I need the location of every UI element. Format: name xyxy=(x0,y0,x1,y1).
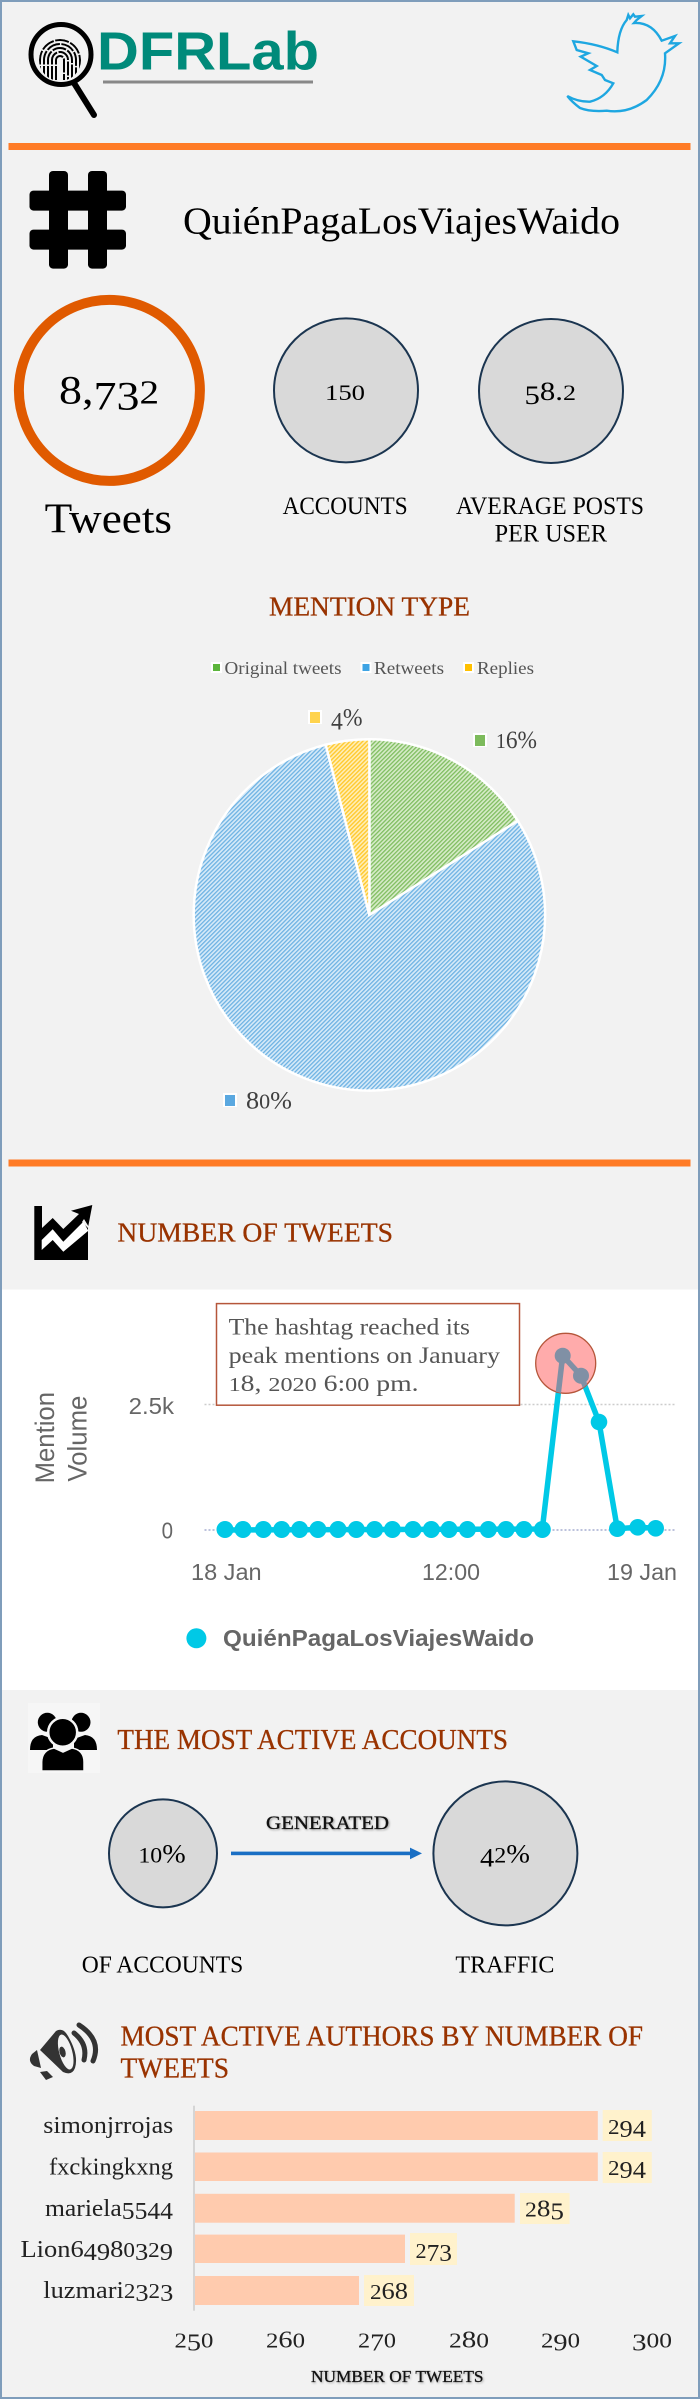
heading: mention type: MENTION TYPE xyxy=(269,591,470,621)
stat: accounts: ACCOUNTS xyxy=(283,493,408,520)
y axis labels: 0 xyxy=(162,1518,173,1544)
chart legend: hashtag: QuiénPagaLosViajesWaido xyxy=(223,1625,534,1651)
stat: tweets: Tweets xyxy=(45,497,172,543)
x axis ticks: 3 xyxy=(632,2330,647,2356)
icon: hashtag xyxy=(30,171,126,269)
bar: Lion64980329 273: 0 xyxy=(123,2238,135,2262)
pie label: 4% xyxy=(308,704,362,735)
panel: line chart xyxy=(2,1290,698,1690)
bar: Lion64980329 273: 2 xyxy=(148,2238,160,2262)
header xyxy=(31,14,679,115)
stat: tweets xyxy=(19,300,200,543)
axis title: mention volume xyxy=(30,1392,92,1483)
logo: DFRLab xyxy=(31,22,319,115)
x axis ticks: 2 xyxy=(541,2328,553,2352)
stat: tweets: 8, xyxy=(59,368,89,413)
stat: average posts per user: .2 xyxy=(555,377,574,406)
x axis ticks: 2 xyxy=(174,2328,187,2352)
bar: fxckingkxng 294: 94 xyxy=(620,2158,646,2184)
stat: 10% of accounts xyxy=(82,1799,243,1979)
bar: fxckingkxng 294: fxckingkxng xyxy=(49,2154,173,2180)
callout: peak mentions: The hashtag reached its xyxy=(229,1315,470,1340)
pie label: 4%: 4 xyxy=(331,708,343,735)
x axis labels: 12:00 xyxy=(422,1559,480,1585)
bar: simonjrrojas 294: 94 xyxy=(620,2117,646,2143)
bar: luzmari2323 268: luzmari 2 xyxy=(43,2278,134,2304)
pie label: 80% xyxy=(223,1087,292,1114)
x axis ticks: 9 xyxy=(553,2330,568,2356)
bar: Lion64980329 273: 73 xyxy=(427,2241,452,2267)
stat: 42% traffic: 4 xyxy=(480,1844,494,1873)
axis title: mention volume: Mention xyxy=(30,1392,60,1483)
peak highlight xyxy=(535,1332,596,1394)
icon: trend chart xyxy=(34,1205,92,1260)
y axis labels: 2.5k xyxy=(129,1393,175,1419)
stat: average posts per user: PER USER xyxy=(495,520,607,548)
stat: accounts xyxy=(274,318,418,520)
pie chart: mention type xyxy=(194,704,545,1114)
stat: tweets: 73 xyxy=(93,374,139,419)
x axis ticks: 0 xyxy=(384,2328,396,2352)
icon: people xyxy=(28,1703,100,1773)
stat: average posts per user xyxy=(456,319,644,548)
bar: simonjrrojas 294: simonjrrojas xyxy=(43,2113,173,2139)
bar: luzmari2323 268: 268 xyxy=(370,2279,408,2305)
arrow: generated: GENERATED xyxy=(266,1813,389,1834)
x axis ticks: 2 xyxy=(358,2328,370,2352)
bar: luzmari2323 268 xyxy=(43,2275,414,2307)
x axis title: NUMBER OF TWEETS xyxy=(311,2367,484,2386)
stat: accounts: 150 xyxy=(325,380,365,405)
line series xyxy=(216,1356,664,1538)
x axis ticks: 0 xyxy=(568,2328,580,2352)
axis title: mention volume: Volume xyxy=(62,1396,92,1482)
pie label: 4%: % xyxy=(343,704,362,731)
arrow: generated xyxy=(231,1813,422,1859)
x axis ticks: 00 xyxy=(647,2328,672,2352)
x axis ticks: 280 xyxy=(449,2327,489,2353)
chart legend: mention type xyxy=(211,658,534,678)
bar: Lion64980329 273: 9 xyxy=(160,2240,173,2266)
bar: Lion64980329 273: 8 xyxy=(110,2237,123,2263)
title: hashtag name: QuiénPagaLosViajesWaido xyxy=(183,200,620,242)
x axis labels: 19 Jan xyxy=(607,1559,677,1585)
chart legend: mention type: Retweets xyxy=(374,658,444,678)
stat: tweets: 2 xyxy=(139,375,159,412)
bar: mariela5544 285 xyxy=(45,2193,570,2226)
bar: Lion64980329 273: 3 xyxy=(135,2240,148,2266)
heading: most active authors: TWEETS xyxy=(120,2054,229,2085)
stat: 42% traffic xyxy=(433,1781,577,1979)
bar: Lion64980329 273: Lion6 xyxy=(20,2237,78,2263)
bar: fxckingkxng 294: 2 xyxy=(608,2156,620,2180)
icon: twitter bird xyxy=(567,14,679,111)
bar: Lion64980329 273: 2 xyxy=(416,2239,427,2263)
bar: mariela5544 285: 28 xyxy=(525,2196,549,2222)
heading: most active accounts: THE MOST ACTIVE ACCOUNTS xyxy=(117,1725,508,1756)
x axis labels: 18 Jan xyxy=(191,1559,262,1585)
bar: simonjrrojas 294: 2 xyxy=(608,2115,620,2139)
y axis labels xyxy=(129,1393,175,1544)
logo: DFRLab: DFRLab xyxy=(97,22,319,82)
pie label: 16% xyxy=(473,727,537,754)
x axis ticks: 7 xyxy=(370,2330,384,2356)
bar: fxckingkxng 294 xyxy=(49,2152,652,2184)
bar: Lion64980329 273 xyxy=(20,2233,457,2267)
stat: average posts per user: 5 xyxy=(524,381,540,410)
x axis ticks xyxy=(174,2327,672,2356)
bar: simonjrrojas 294 xyxy=(43,2110,652,2143)
icon: megaphone xyxy=(30,2025,96,2080)
chart legend: mention type: Replies xyxy=(477,658,534,678)
x axis ticks: 5 xyxy=(187,2330,201,2356)
bar: mariela5544 285: mariela xyxy=(45,2196,117,2222)
callout: peak mentions: peak mentions on January xyxy=(229,1343,501,1368)
pie label: 80%: 80% xyxy=(246,1087,292,1114)
stat: average posts per user: 8 xyxy=(540,377,555,406)
x axis ticks: 0 xyxy=(201,2328,213,2352)
heading: number of tweets: NUMBER OF TWEETS xyxy=(117,1218,393,1248)
stat: average posts per user: AVERAGE POSTS xyxy=(456,493,644,520)
bar: luzmari2323 268: 2 xyxy=(149,2279,160,2303)
x axis labels xyxy=(191,1559,677,1585)
bar: mariela5544 285: 5544 xyxy=(122,2199,173,2225)
chart legend: mention type: Original tweets xyxy=(224,658,342,678)
x axis ticks: 260 xyxy=(266,2327,305,2353)
pie label: 16%: 16% xyxy=(496,727,537,754)
heading: most active authors xyxy=(120,2022,643,2085)
bar: mariela5544 285: 5 xyxy=(550,2200,564,2226)
stat: 10% of accounts: 10% xyxy=(138,1840,186,1869)
stat: 42% traffic: % xyxy=(506,1840,528,1869)
stat: 42% traffic: 2 xyxy=(494,1843,506,1868)
callout: peak mentions xyxy=(216,1304,520,1405)
heading: most active authors: MOST ACTIVE AUTHORS BY NUMBER OF xyxy=(120,2022,643,2053)
callout: peak mentions: 18, 2020 6:00 pm. xyxy=(229,1371,419,1396)
stat: 42% traffic: TRAFFIC xyxy=(455,1953,554,1979)
bar: Lion64980329 273: 49 xyxy=(84,2240,110,2266)
bar chart: most active authors xyxy=(20,2106,672,2386)
stat: 10% of accounts: OF ACCOUNTS xyxy=(82,1953,243,1979)
bar: luzmari2323 268: 3 xyxy=(160,2281,173,2307)
bar: luzmari2323 268: 3 xyxy=(135,2281,149,2307)
